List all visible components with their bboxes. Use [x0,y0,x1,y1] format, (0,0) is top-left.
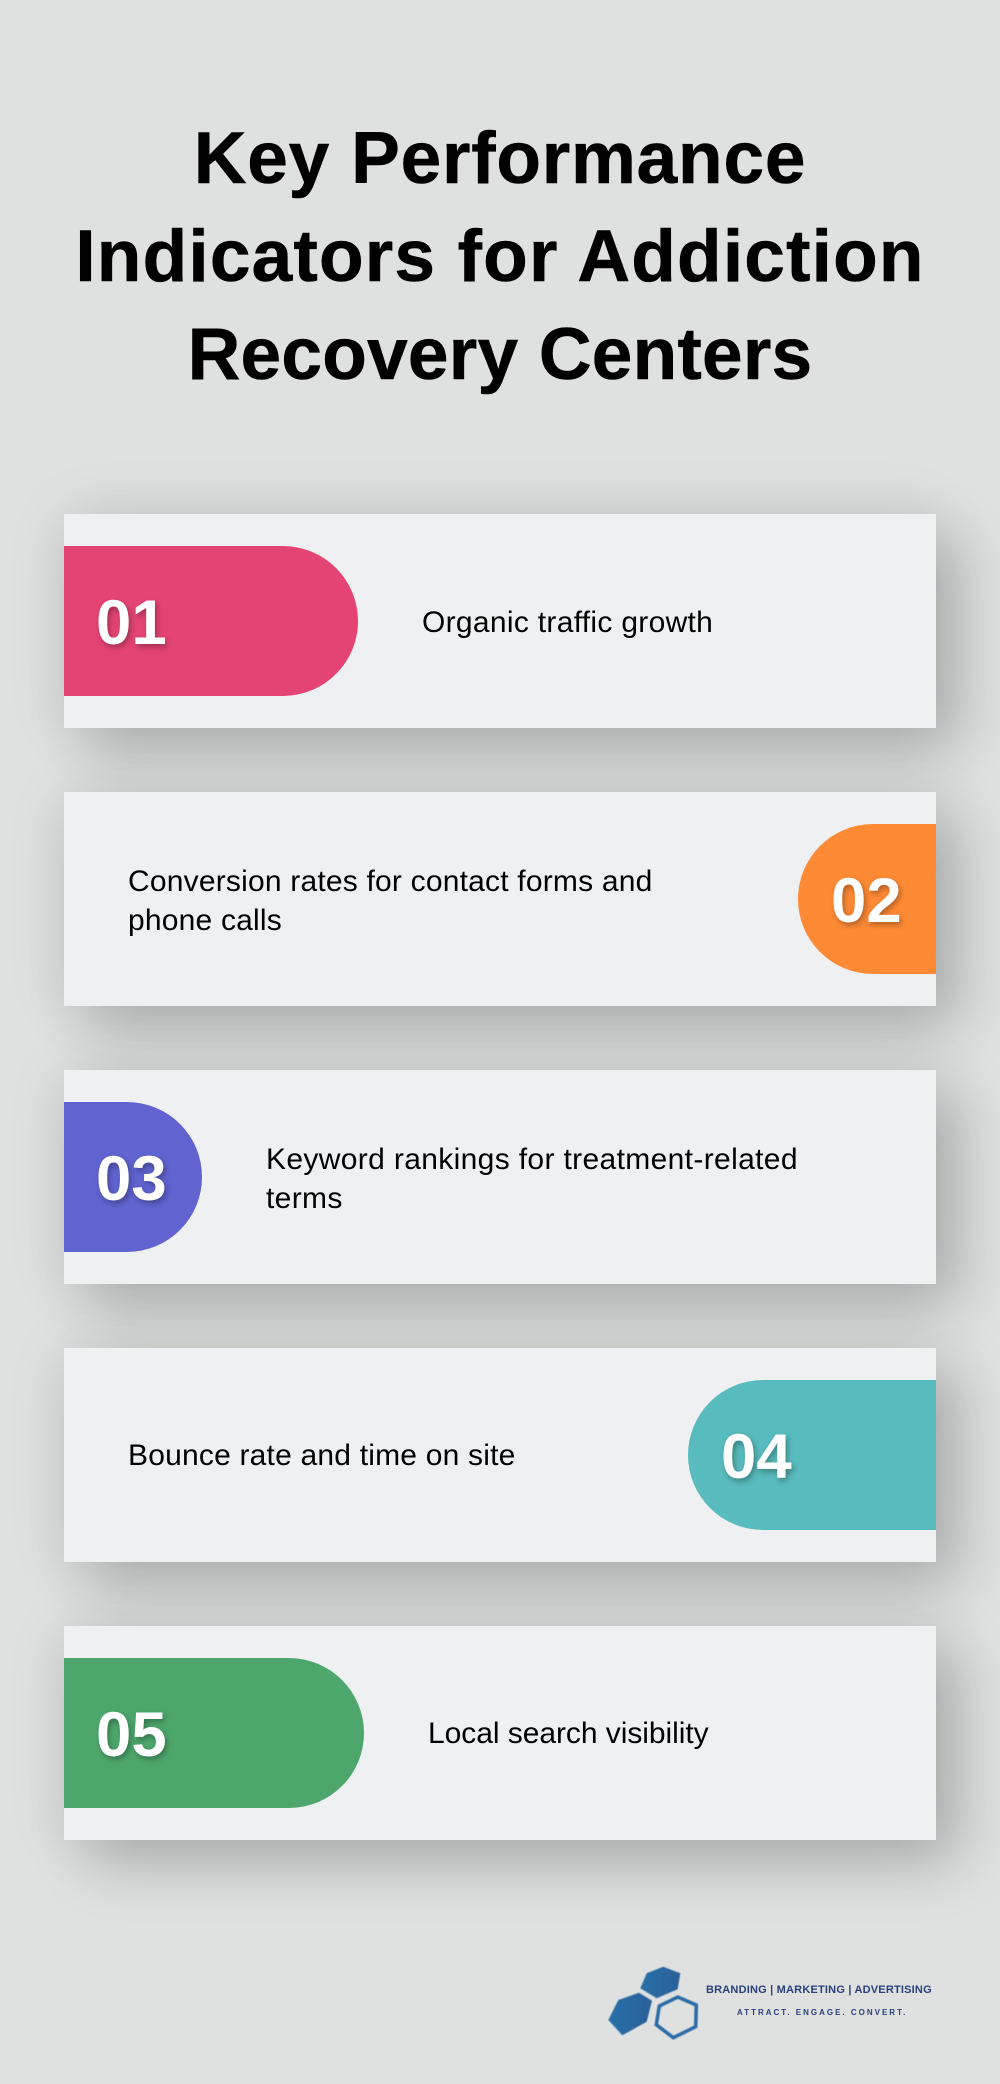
badge 02: 02 [831,866,902,936]
tagline bottom: ATTRACT. ENGAGE. CONVERT. [737,2008,907,2017]
title: Key Performance [194,118,806,199]
badge 02 [798,824,936,974]
panel: item 02 [64,792,936,1006]
badge 05: 05 [96,1700,167,1770]
text 03 [266,1143,798,1215]
text 02: phone calls [128,904,282,937]
text 02 [128,865,652,937]
panel: item 05 [64,1626,936,1840]
icon: hexagons [608,1966,699,2040]
text 04: Bounce rate and time on site [128,1439,516,1472]
badge 03 [64,1102,202,1252]
badge 05 [64,1658,364,1808]
title: Recovery Centers [188,314,812,395]
title: Indicators for Addiction [75,216,925,297]
text 03: Keyword rankings for treatment-related [266,1143,798,1176]
badge 01 [64,546,358,696]
panel: item 01 [64,514,936,728]
text 02: Conversion rates for contact forms and [128,865,652,898]
text 03: terms [266,1182,343,1215]
title [75,118,925,395]
text 05: Local search visibility [428,1717,709,1750]
badge 03: 03 [96,1144,167,1214]
badge 04: 04 [721,1422,792,1492]
badge 01: 01 [96,588,167,658]
badge 04 [688,1380,936,1530]
logo [608,1966,932,2040]
panel: item 03 [64,1070,936,1284]
panel: item 04 [64,1348,936,1562]
text 01: Organic traffic growth [422,606,713,639]
tagline top: BRANDING | MARKETING | ADVERTISING [706,1984,932,1996]
